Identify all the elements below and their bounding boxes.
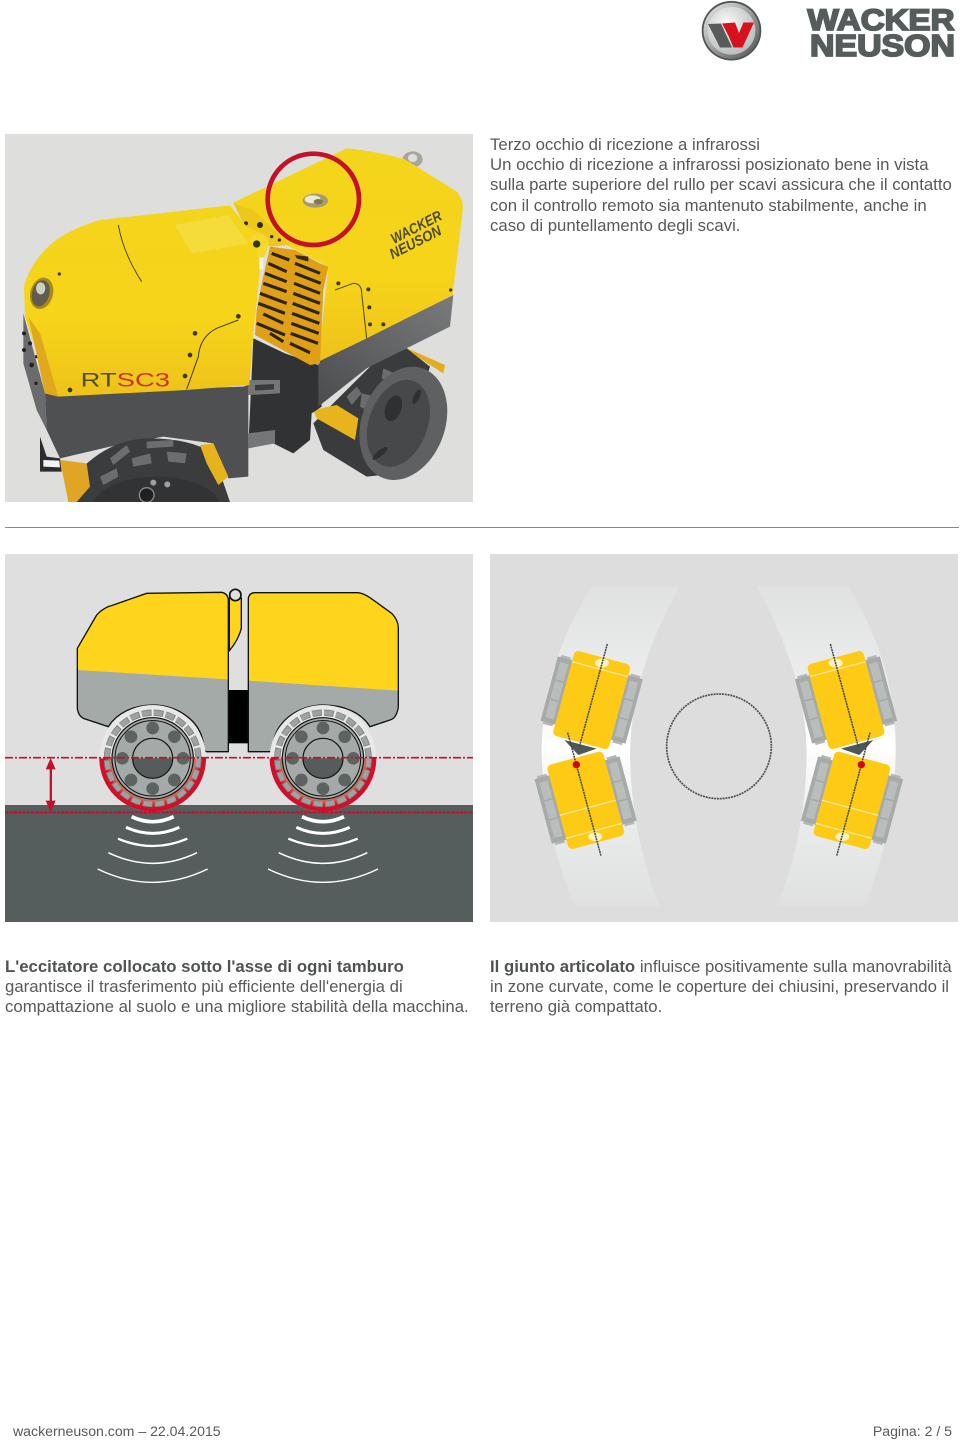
- panel: top view diagram of articulated steering: [490, 554, 958, 922]
- front drum: [60, 438, 230, 502]
- hitch loop: [248, 234, 269, 270]
- ventilation grille: [255, 247, 328, 365]
- arrow: compaction height: [46, 758, 56, 812]
- front body left edge: [22, 313, 47, 430]
- footer: page number: Pagina: 2 / 5: [873, 1423, 952, 1439]
- lower left shading: [28, 317, 58, 397]
- rear logo text: NEUSON: [387, 223, 445, 263]
- roller: right position: [792, 644, 906, 856]
- panel: roller photo with infrared eye: [5, 134, 473, 502]
- logo: Wacker Neuson emblem and wordmark: [702, 0, 956, 63]
- front side bracket: [40, 437, 62, 472]
- text block: articulated joint: [490, 957, 952, 1016]
- panel: side view diagram of exciter under the axle: [5, 554, 473, 922]
- rear drum: [270, 705, 376, 812]
- rear logo text: WACKER: [389, 208, 445, 248]
- text block: infrared eye: sulla parte superiore del rullo per scavi assicura che il contatto: [490, 175, 952, 194]
- front drum: [99, 705, 206, 812]
- text block: infrared eye: Un occhio di ricezione a infrarossi posizionato bene in vista: [490, 155, 929, 174]
- text block: exciter: compattazione al suolo e una migliore stabilità della macchina.: [5, 997, 469, 1016]
- roller: left position: [532, 644, 646, 856]
- text block: exciter: L'eccitatore collocato sotto l'asse di ogni tamburo: [5, 957, 404, 976]
- divider: [5, 527, 959, 528]
- red highlight circle: [268, 154, 359, 245]
- articulation joint: [228, 589, 248, 743]
- vibration waves: front: [98, 817, 208, 882]
- text block: infrared eye: con il controllo remoto sia mantenuto stabilmente, anche in: [490, 196, 927, 215]
- central articulation: [248, 338, 322, 453]
- ground: [5, 805, 473, 922]
- hood seam: [118, 225, 142, 282]
- wordmark: WACKER: [808, 4, 955, 37]
- text block: infrared eye: [490, 135, 952, 235]
- machine body: rear: [248, 593, 398, 752]
- text block: exciter: [5, 957, 469, 1016]
- rear bolt: [403, 151, 423, 167]
- footer: site and date: wackerneuson.com – 22.04.2015: [13, 1423, 221, 1439]
- vibration waves: rear: [268, 817, 378, 882]
- rear body skirt: [318, 295, 453, 407]
- hardware strip: [233, 203, 290, 247]
- wordmark: NEUSON: [810, 28, 955, 63]
- rear logo text: [390, 211, 442, 260]
- left curved lane: [542, 587, 680, 907]
- wordmark: [808, 4, 955, 63]
- front body: [24, 205, 267, 397]
- turning circle: [667, 694, 771, 799]
- front skirt: [45, 385, 248, 478]
- text block: infrared eye: caso di puntellamento degli scavi.: [490, 216, 740, 235]
- text block: articulated joint: in zone curvate, come le coperture dei chiusini, preservando il: [490, 977, 949, 996]
- text block: infrared eye: Terzo occhio di ricezione a infrarossi: [490, 135, 760, 154]
- rear body: [233, 148, 463, 362]
- reference lines: [5, 758, 473, 812]
- hood recess: [175, 215, 248, 253]
- front panel seam: [187, 320, 238, 389]
- machine body: front: [77, 592, 228, 752]
- model name: RTSC3: [81, 371, 170, 392]
- headlight: [30, 278, 54, 310]
- rear panel seam: [335, 283, 367, 338]
- right curved lane: [757, 587, 896, 907]
- text block: articulated joint: Il giunto articolato influisce positivamente sulla manovrabilità: [490, 957, 952, 976]
- rear drum: [313, 348, 448, 480]
- infrared eye: [303, 194, 328, 208]
- text block: articulated joint: terreno già compattato.: [490, 997, 662, 1016]
- text block: exciter: garantisce il trasferimento più efficiente dell'energia di: [5, 977, 403, 996]
- icon: emblem: [702, 1, 761, 60]
